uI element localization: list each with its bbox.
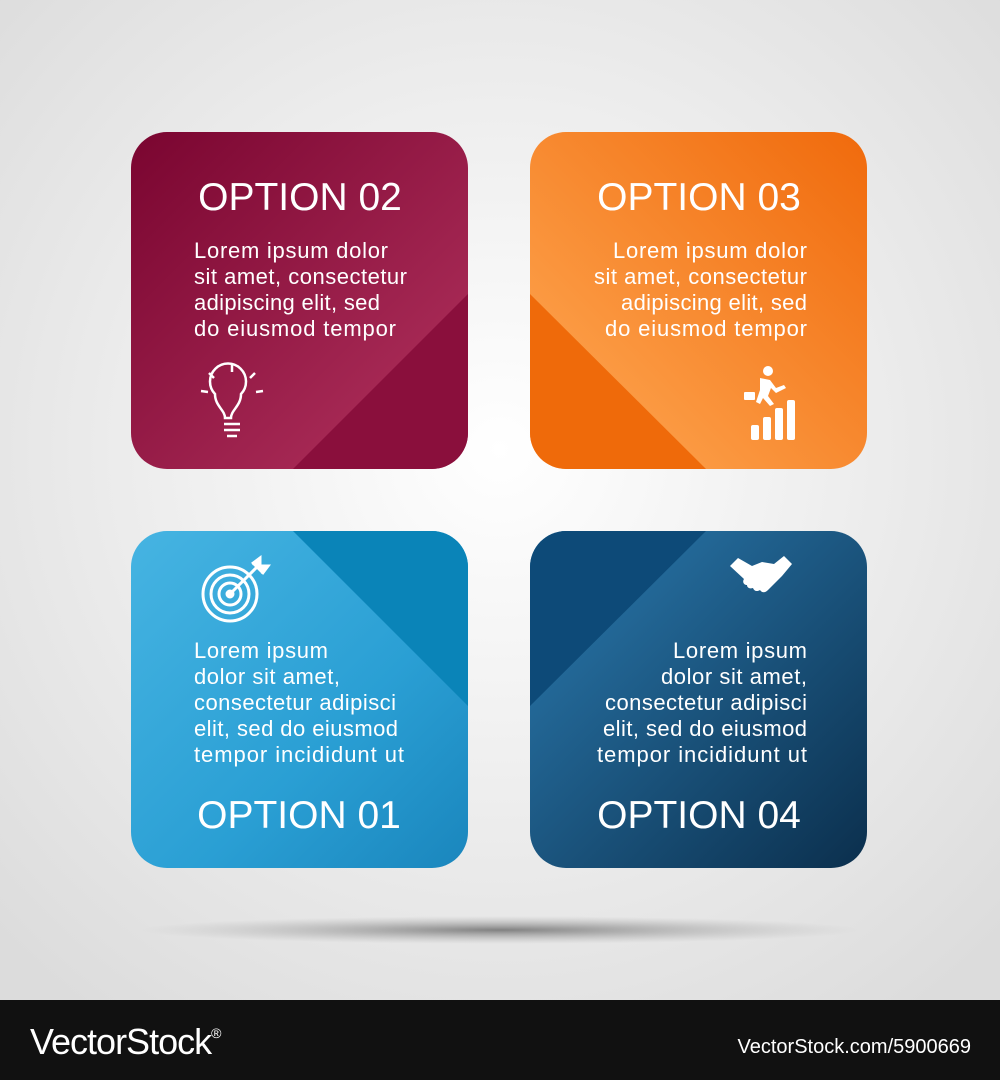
text block: option 02: adipiscing elit, sed	[194, 290, 380, 315]
text block: option 04: tempor incididunt ut	[597, 742, 807, 767]
icon: runner on chart	[744, 366, 795, 440]
text block: option 03: sit amet, consectetur	[594, 264, 807, 289]
footer url: VectorStock.com/5900669	[738, 1036, 971, 1058]
text block: option 04: Lorem ipsum	[673, 638, 807, 663]
text block: option 02: do eiusmod tempor	[194, 316, 396, 341]
panel: option 02	[131, 132, 468, 469]
text block: option 02: Lorem ipsum dolor	[194, 238, 388, 263]
panel: option 01	[131, 531, 468, 868]
panel: option 04	[530, 531, 867, 868]
text block: option 03: do eiusmod tempor	[605, 316, 807, 341]
heading: option 01: OPTION 01	[197, 794, 401, 837]
text block: option 01: dolor sit amet,	[194, 664, 340, 689]
icon: target	[203, 558, 268, 621]
footer logo: VectorStock	[30, 1021, 211, 1062]
text block: option 02: sit amet, consectetur	[194, 264, 407, 289]
footer logo: ®	[211, 1025, 222, 1041]
text block: option 01: consectetur adipisci	[194, 690, 396, 715]
text block: option 04: elit, sed do eiusmod	[603, 716, 807, 741]
text block: option 04: consectetur adipisci	[605, 690, 807, 715]
footer bar	[0, 1000, 1000, 1080]
text block: option 03: adipiscing elit, sed	[621, 290, 807, 315]
text block: option 01: tempor incididunt ut	[194, 742, 404, 767]
heading: option 03: OPTION 03	[597, 176, 801, 219]
icon: handshake	[730, 556, 792, 592]
panel: option 03	[530, 132, 867, 469]
text block: option 01: Lorem ipsum	[194, 638, 328, 663]
floor shadow	[140, 916, 860, 944]
heading: option 02: OPTION 02	[198, 176, 402, 219]
text block: option 01: elit, sed do eiusmod	[194, 716, 398, 741]
text block: option 03: Lorem ipsum dolor	[613, 238, 807, 263]
icon: light bulb	[201, 364, 263, 436]
text block: option 04: dolor sit amet,	[661, 664, 807, 689]
heading: option 04: OPTION 04	[597, 794, 801, 837]
